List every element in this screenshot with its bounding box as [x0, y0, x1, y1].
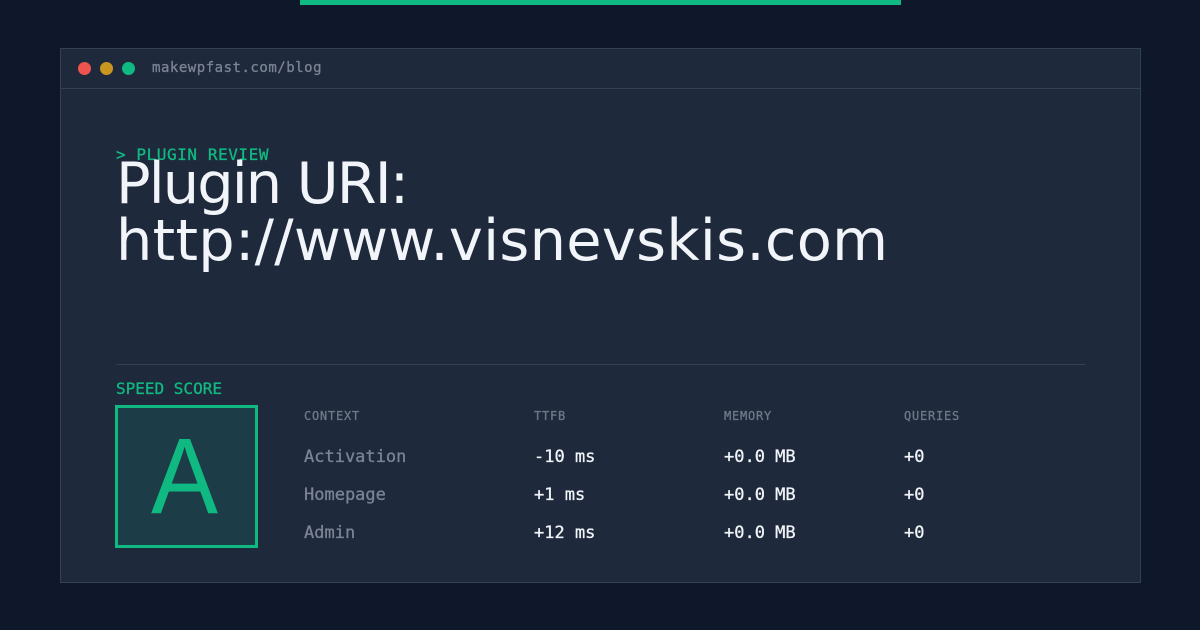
activation ttfb: -10 ms — [534, 447, 595, 467]
title — [116, 150, 888, 274]
row label: activation: Activation — [304, 447, 406, 467]
admin queries: +0 — [904, 523, 924, 543]
admin memory: +0.0 MB — [724, 523, 796, 543]
admin ttfb: +12 ms — [534, 523, 595, 543]
table header: context: CONTEXT — [304, 409, 360, 423]
top accent bar — [300, 0, 901, 5]
title: http://www.visnevskis.com — [116, 207, 888, 274]
homepage memory: +0.0 MB — [724, 485, 796, 505]
table header: queries: QUERIES — [904, 409, 960, 423]
url text: makewpfast.com/blog — [152, 60, 322, 76]
window title bar — [61, 49, 1140, 89]
homepage ttfb: +1 ms — [534, 485, 585, 505]
speed score label: SPEED SCORE — [116, 379, 222, 398]
activation memory: +0.0 MB — [724, 447, 796, 467]
table header: ttfb: TTFB — [534, 409, 566, 423]
table header: memory: MEMORY — [724, 409, 772, 423]
icon: green window dot — [122, 62, 135, 75]
panel: terminal window — [60, 48, 1141, 583]
row label: admin: Admin — [304, 523, 355, 543]
activation queries: +0 — [904, 447, 924, 467]
metrics table — [304, 405, 964, 550]
row label: homepage: Homepage — [304, 485, 386, 505]
icon: amber window dot — [100, 62, 113, 75]
homepage queries: +0 — [904, 485, 924, 505]
grade badge — [115, 405, 258, 548]
eyebrow label: > PLUGIN REVIEW — [116, 145, 269, 164]
icon: red window dot — [78, 62, 91, 75]
grade letter: A — [151, 415, 218, 536]
title: Plugin URI: — [116, 150, 407, 217]
divider — [116, 364, 1085, 365]
